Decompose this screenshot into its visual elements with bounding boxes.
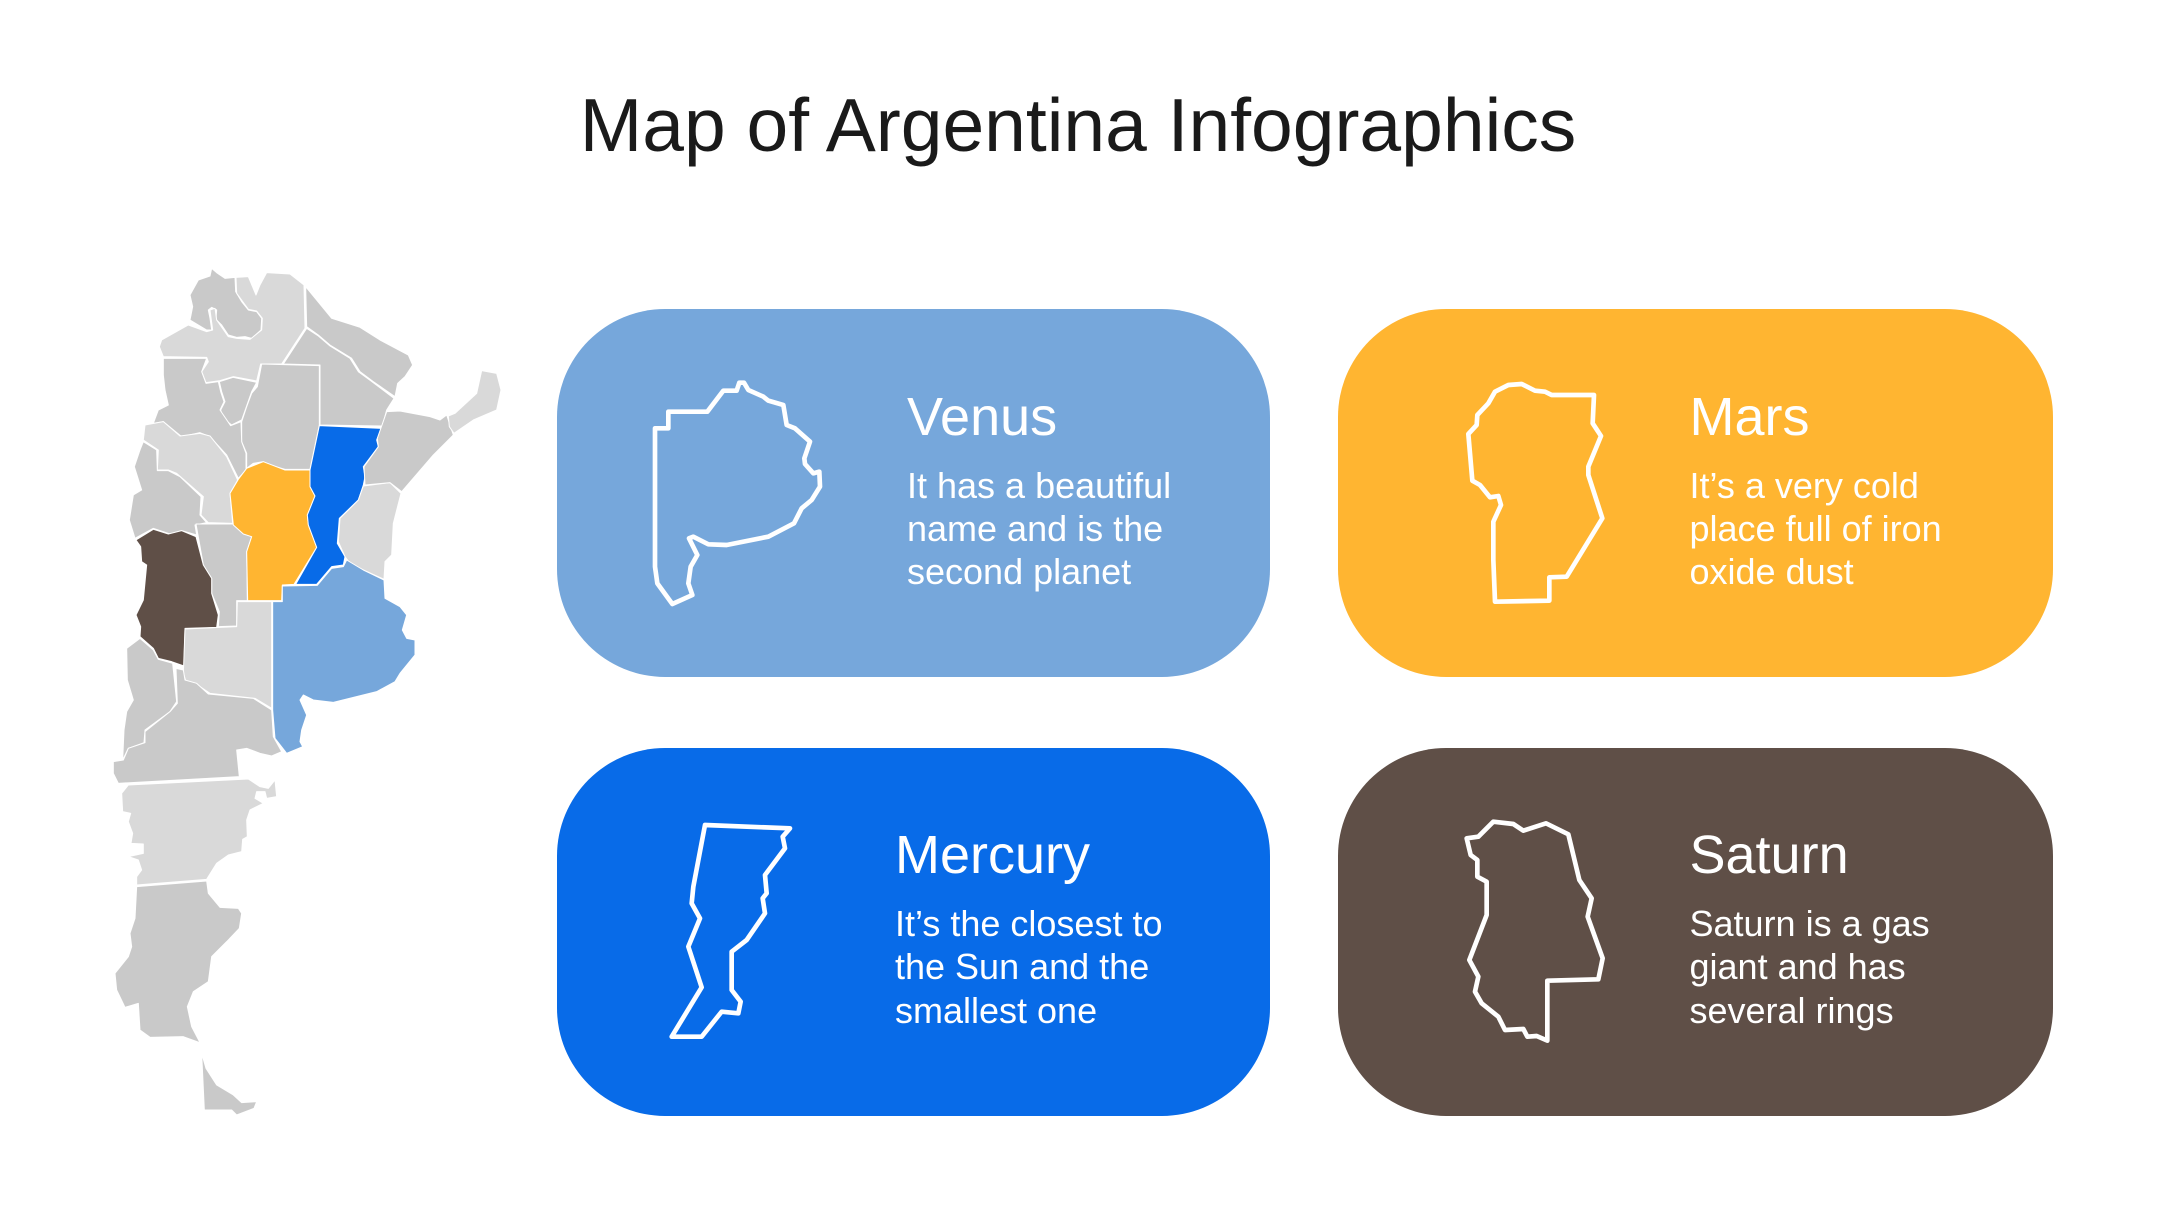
icon: Santa Fe outline [672,825,790,1037]
text: Saturn description: several rings [1690,990,1894,1031]
province: Entre Rios [338,483,401,579]
heading: Venus: Venus [907,387,1057,447]
title: Map of Argentina Infographics [580,83,1576,167]
province: Santiago del Estero [242,364,319,469]
panel: Saturn [1338,748,2053,1116]
province: San Luis [196,524,252,627]
province: Cordoba highlighted [230,462,317,601]
province: San Juan [129,442,207,538]
province: Misiones [448,371,501,433]
icon: Cordoba outline [1468,384,1602,602]
icon: Mendoza outline [1467,822,1603,1041]
panel: Mars [1338,309,2053,677]
heading: Mercury: Mercury [895,825,1090,885]
province: Formosa [306,287,413,397]
province: Tierra del Fuego [202,1053,257,1115]
text: Saturn description: giant and has [1690,946,1906,987]
text: Mercury description: smallest one [895,990,1097,1031]
icon: Buenos Aires outline [655,383,820,604]
province: La Pampa [183,602,272,708]
province: Catamarca [153,358,246,478]
text: Mercury description: the Sun and the [895,946,1149,987]
map of Argentina [113,268,501,1115]
text: Mars description: place full of iron [1690,508,1942,549]
province: Corrientes [364,411,453,492]
province: La Rioja [143,422,238,523]
province: Chubut [122,779,277,885]
province: Jujuy [190,268,262,338]
text: Venus description: second planet [907,551,1131,592]
heading: Saturn: Saturn [1690,825,1849,885]
province: Mendoza highlighted [136,529,218,666]
text: Mars description: It’s a very cold [1690,465,1919,506]
heading: Mars: Mars [1690,387,1810,447]
province: Buenos Aires highlighted [273,560,415,753]
text: Mercury description: It’s the closest to [895,903,1162,944]
panel: Mercury [557,748,1270,1116]
panel: Venus [557,309,1270,677]
province: Salta [159,273,305,383]
text: Mars description: oxide dust [1690,551,1854,592]
text: Venus description: It has a beautiful [907,465,1171,506]
province: Tucuman [219,377,257,425]
province: Neuquen [123,638,177,760]
province: Rio Negro [113,668,282,783]
province: Santa Cruz [115,881,242,1043]
text: Venus description: name and is the [907,508,1163,549]
province: Santa Fe highlighted [296,426,382,584]
province: Chaco [283,328,394,426]
text: Saturn description: Saturn is a gas [1690,903,1930,944]
